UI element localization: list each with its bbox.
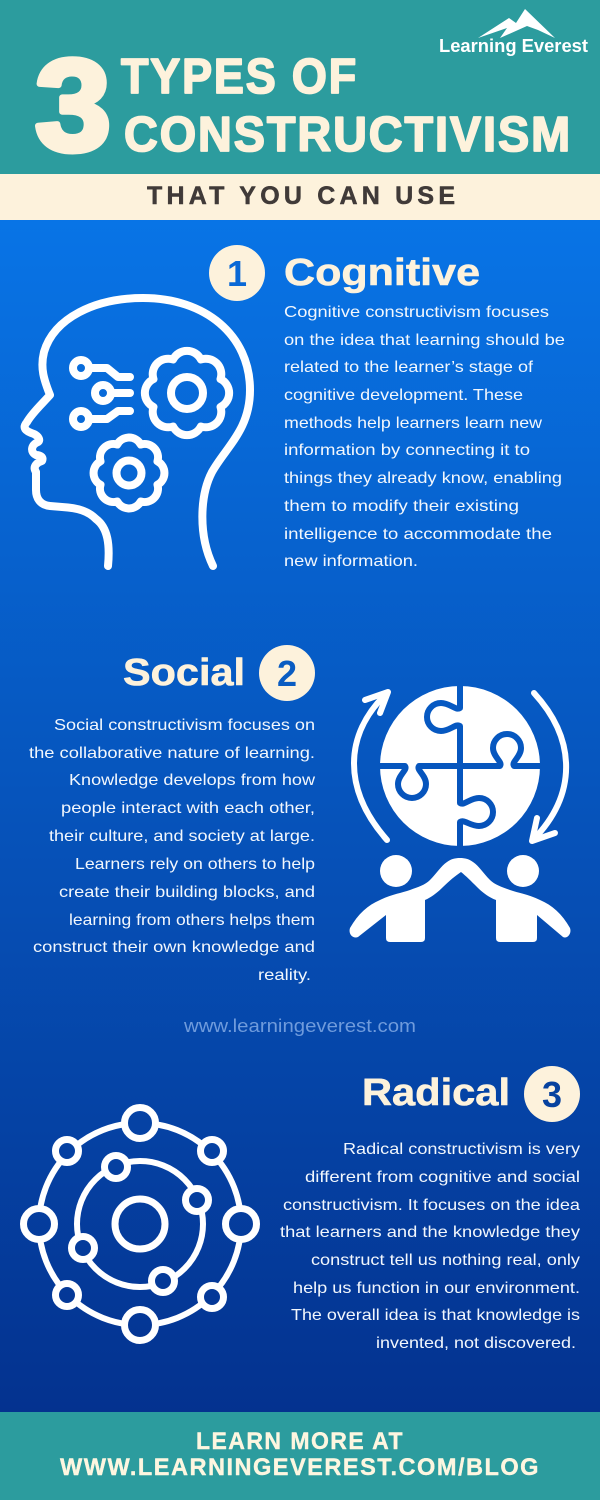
footer band: [0, 1412, 600, 1500]
body text: social: [29, 717, 316, 984]
subtitle text: THAT YOU CAN USE: [147, 182, 455, 210]
number badge 3: 3: [542, 1074, 562, 1115]
number badge 1: [209, 245, 265, 301]
body text: radical: that learners and the knowledge they: [280, 1224, 580, 1241]
body text: radical: constructivism. It focuses on the idea: [283, 1197, 580, 1214]
website watermark: www.learningeverest.com: [183, 1016, 416, 1036]
body text: social: Learners rely on others to help: [75, 856, 315, 873]
body text: cognitive: things they already know, enabling: [284, 470, 562, 487]
body text: cognitive: related to the learner’s stage of: [284, 359, 534, 376]
body text: radical: help us function in our environment.: [293, 1280, 580, 1297]
logo: Learning Everest: Learning Everest: [439, 36, 588, 56]
header band: [0, 0, 600, 178]
body text: radical: invented, not discovered.: [376, 1335, 576, 1352]
body text: radical: Radical constructivism is very: [343, 1141, 580, 1158]
number badge 2: 2: [277, 653, 297, 694]
body text: cognitive: new information.: [284, 553, 418, 570]
body text: social: create their building blocks, and: [59, 884, 315, 901]
body text: social: Knowledge develops from how: [69, 772, 316, 789]
body text: social: the collaborative nature of learning.: [29, 745, 315, 762]
subtitle band: [0, 174, 600, 220]
logo: Learning Everest: [439, 9, 588, 56]
section 3: radical: [24, 1066, 580, 1352]
footer line: blog url: WWW.LEARNINGEVEREST.COM/BLOG: [60, 1454, 540, 1481]
body text: cognitive: them to modify their existing: [284, 498, 519, 515]
icon: two people holding puzzle globe: [350, 684, 570, 942]
body text: cognitive: cognitive development. These: [284, 387, 523, 404]
body text: social: their culture, and society at large.: [49, 828, 315, 845]
footer line: learn more at: LEARN MORE AT: [196, 1428, 404, 1455]
body text: social: construct their own knowledge and: [33, 939, 315, 956]
body text: cognitive: Cognitive constructivism focuses: [284, 304, 549, 321]
body text: cognitive: information by connecting it to: [284, 442, 530, 459]
icon: head with gears: [25, 298, 250, 566]
title numeral 3: 3: [35, 32, 111, 178]
number badge 2: [259, 645, 315, 701]
title line: types of: TYPES OF: [121, 50, 358, 104]
body text: radical: construct tell us nothing real, only: [311, 1252, 580, 1269]
body text: cognitive: [284, 304, 565, 570]
body text: social: reality.: [258, 967, 311, 984]
body text: social: learning from others helps them: [69, 912, 315, 929]
section 2: social: [29, 645, 570, 984]
body text: radical: different from cognitive and social: [305, 1169, 580, 1186]
heading: social: Social: [123, 652, 245, 694]
number badge 3: [524, 1066, 580, 1122]
body text: radical: [280, 1141, 580, 1352]
heading: cognitive: Cognitive: [284, 252, 480, 294]
body text: cognitive: on the idea that learning should be: [284, 332, 565, 349]
body text: social: Social constructivism focuses on: [54, 717, 315, 734]
title line: constructivism: CONSTRUCTIVISM: [124, 108, 572, 162]
body text: social: people interact with each other,: [61, 800, 315, 817]
body text: radical: The overall idea is that knowledge is: [291, 1307, 580, 1324]
icon: atom orbits: [24, 1108, 256, 1340]
body text: cognitive: methods help learners learn new: [284, 415, 542, 432]
section 1: cognitive: [25, 245, 565, 570]
number badge 1: 1: [227, 253, 247, 294]
heading: radical: Radical: [362, 1072, 510, 1114]
body text: cognitive: intelligence to accommodate the: [284, 526, 552, 543]
main gradient panel: [0, 220, 600, 1412]
